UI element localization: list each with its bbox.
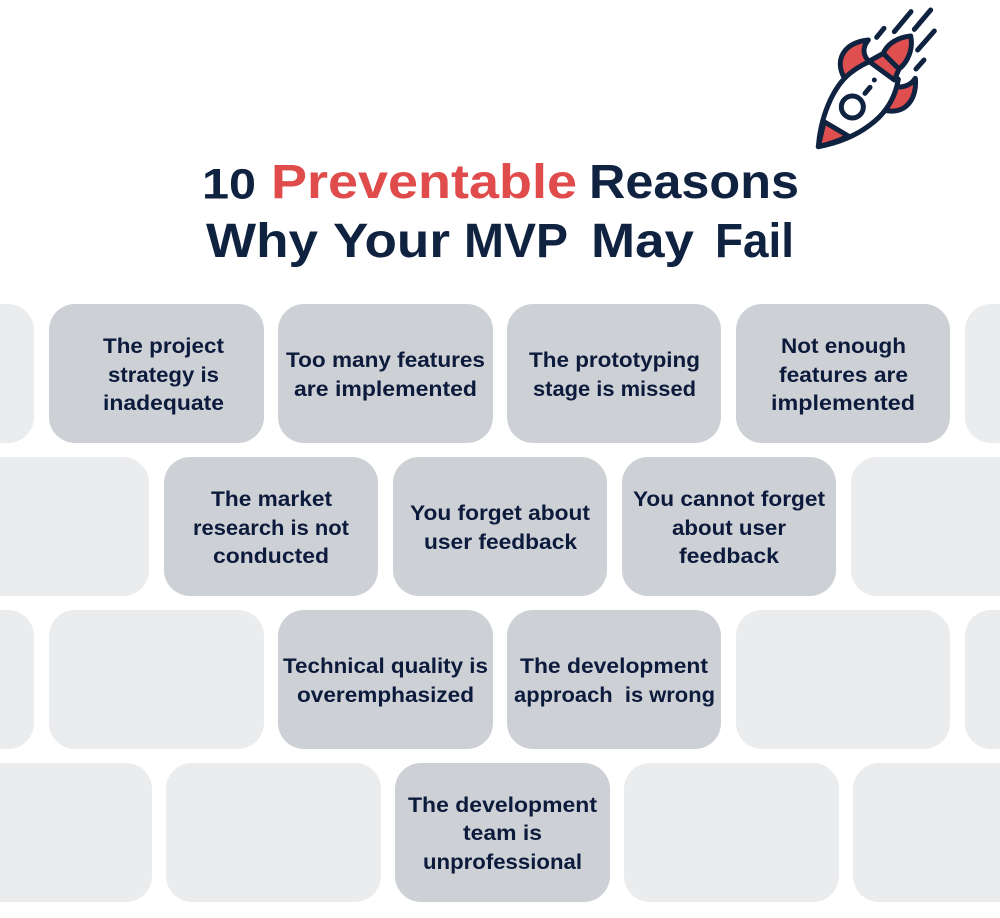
card: too many features [278, 304, 493, 443]
card: not enough features: features are [779, 363, 908, 387]
title: 10 [202, 160, 256, 208]
card: development approach [507, 610, 721, 749]
card: prototyping missed: stage is missed [533, 377, 696, 401]
card: forget user feedback: user feedback [424, 530, 577, 554]
panel: row 3 cards [0, 610, 1000, 749]
title: MVP [464, 215, 568, 268]
title [202, 156, 799, 268]
card: not enough features: Not enough [781, 334, 906, 358]
title: Your [333, 215, 450, 268]
card: development team: The development [408, 793, 597, 817]
panel: row 1 cards [0, 304, 1000, 443]
card: market research [164, 457, 378, 596]
panel: row 2 cards [0, 457, 1000, 596]
title: Preventable [271, 156, 577, 209]
card: development approach: approach is wrong [514, 683, 715, 707]
card: cannot forget user feedback: about user [672, 516, 787, 540]
card: technical quality: Technical quality is [283, 654, 488, 678]
card: cannot forget user feedback [622, 457, 836, 596]
title: Why [206, 215, 318, 268]
card: too many features: are implemented [294, 377, 477, 401]
title: May [591, 215, 694, 268]
card: development team [395, 763, 610, 902]
card: project strategy: inadequate [103, 391, 224, 415]
card: market research: research is not [193, 516, 349, 540]
card: not enough features [736, 304, 950, 443]
card: forget user feedback: You forget about [410, 501, 590, 525]
card: project strategy [49, 304, 264, 443]
card: cannot forget user feedback: You cannot forget [633, 487, 825, 511]
panel: row 4 cards [0, 763, 1000, 902]
card: development team: unprofessional [423, 850, 582, 874]
icon: rocket [818, 10, 934, 147]
card: too many features: Too many features [286, 348, 485, 372]
card: prototyping missed [507, 304, 721, 443]
card: prototyping missed: The prototyping [529, 348, 700, 372]
card: technical quality: overemphasized [297, 683, 474, 707]
card: project strategy: strategy is [108, 363, 219, 387]
card: technical quality [278, 610, 493, 749]
card: development team: team is [463, 821, 542, 845]
card: market research: The market [211, 487, 332, 511]
card: project strategy: The project [103, 334, 224, 358]
card: not enough features: implemented [771, 391, 915, 415]
card: cannot forget user feedback: feedback [679, 544, 779, 568]
title: Reasons [589, 156, 799, 209]
card: forget user feedback [393, 457, 607, 596]
title: Fail [715, 215, 794, 268]
card: development approach: The development [520, 654, 708, 678]
card: market research: conducted [213, 544, 329, 568]
